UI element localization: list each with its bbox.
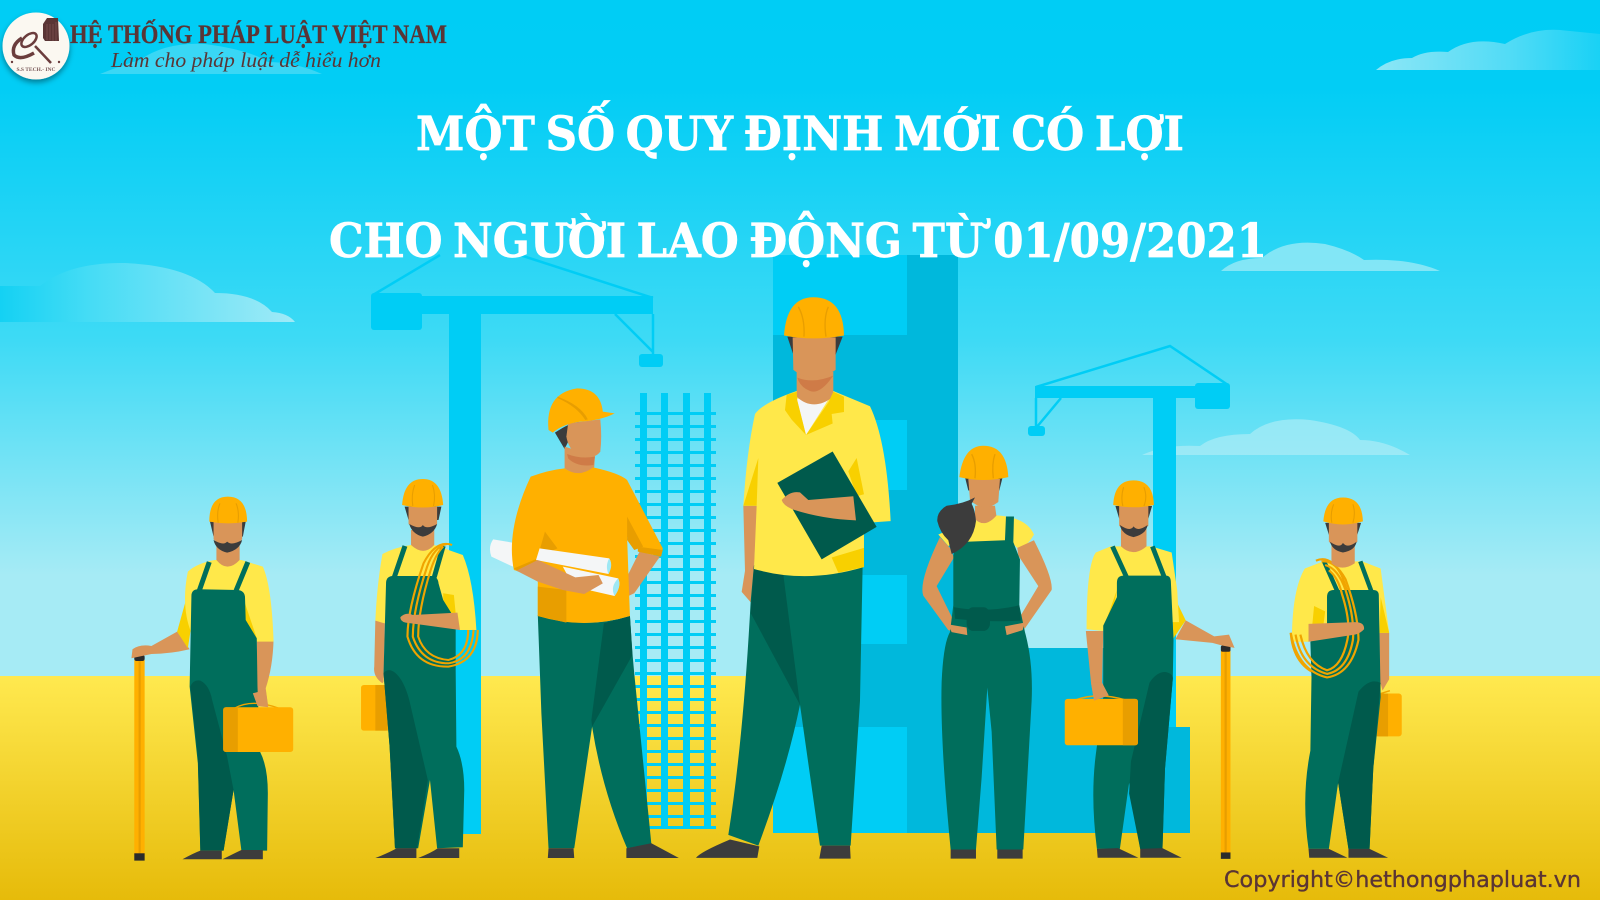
scaffold grid — [635, 393, 716, 829]
building — [773, 255, 958, 833]
building annex — [958, 648, 1190, 833]
logo small text: S.S TECH.- INC — [16, 67, 56, 73]
cloud: top right — [1376, 30, 1600, 70]
background: sky — [0, 0, 1600, 677]
worker 5: woman with ponytail — [922, 446, 1052, 859]
cloud: right middle — [1142, 419, 1410, 455]
logo name: HỆ THỐNG PHÁP LUẬT VIỆT NAM — [70, 20, 447, 49]
logo — [2, 12, 70, 80]
worker 3: blueprints — [490, 388, 679, 858]
logo badge — [2, 12, 70, 80]
worker 6: cane and toolbox — [1065, 480, 1235, 859]
cloud: right of title — [1221, 243, 1440, 271]
background: ground — [0, 676, 1600, 900]
title line 2: CHO NGƯỜI LAO ĐỘNG TỪ 01/09/2021 — [329, 211, 1267, 269]
worker 2: rope and toolbox — [361, 479, 478, 858]
logo dots — [11, 61, 60, 63]
worker 4: foreman with clipboard — [696, 297, 891, 859]
cloud: left — [0, 263, 295, 322]
crane: right — [1028, 346, 1230, 728]
logo gavel icon — [13, 30, 51, 63]
title — [329, 100, 1267, 269]
logo tagline: Làm cho pháp luật dễ hiểu hơn — [110, 48, 381, 72]
copyright: Copyright©hethongphapluat.vn — [1224, 868, 1581, 893]
crane: left — [371, 255, 663, 834]
cloud: behind logo — [100, 44, 322, 74]
title line 1: MỘT SỐ QUY ĐỊNH MỚI CÓ LỢI — [416, 100, 1184, 162]
worker 7: rope and toolbox — [1291, 497, 1402, 858]
worker 1: cane and toolbox — [131, 497, 293, 861]
logo book icon — [43, 18, 59, 41]
